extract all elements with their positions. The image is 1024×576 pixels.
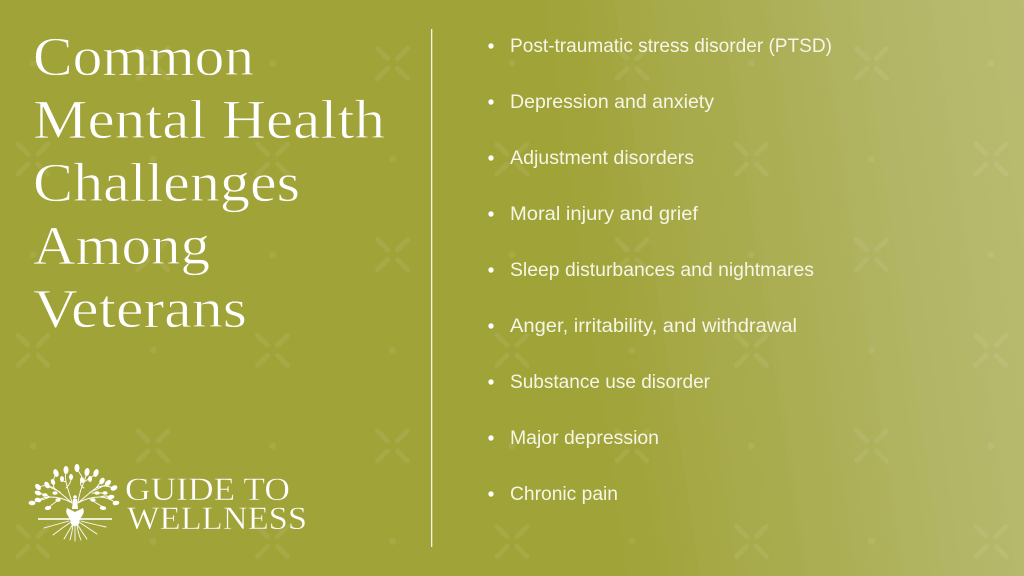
bullet list: Moral injury and grief bbox=[510, 204, 699, 225]
bullet list: Major depression bbox=[510, 428, 659, 449]
bullet list: Chronic pain bbox=[510, 484, 618, 505]
bullet list: Depression and anxiety bbox=[510, 92, 714, 113]
title: Common bbox=[33, 26, 254, 87]
bullet list bbox=[488, 36, 832, 505]
bullet list: Adjustment disorders bbox=[510, 148, 694, 169]
bullet list: Substance use disorder bbox=[510, 372, 711, 393]
bullet list: Sleep disturbances and nightmares bbox=[510, 260, 814, 281]
logo text bbox=[125, 472, 307, 537]
icon: tree with roots bbox=[28, 464, 120, 541]
title: Mental Health bbox=[33, 89, 385, 150]
title: Among bbox=[33, 215, 210, 276]
title: Challenges bbox=[33, 152, 300, 213]
bullet list: Post-traumatic stress disorder (PTSD) bbox=[510, 36, 832, 57]
logo: Guide to Wellness bbox=[28, 464, 307, 541]
title: Veterans bbox=[33, 278, 247, 339]
bullet list: Anger, irritability, and withdrawal bbox=[510, 316, 797, 337]
logo text: GUIDE TO bbox=[125, 472, 290, 508]
divider bbox=[431, 29, 432, 547]
title bbox=[33, 26, 385, 339]
logo text: WELLNESS bbox=[127, 501, 307, 537]
